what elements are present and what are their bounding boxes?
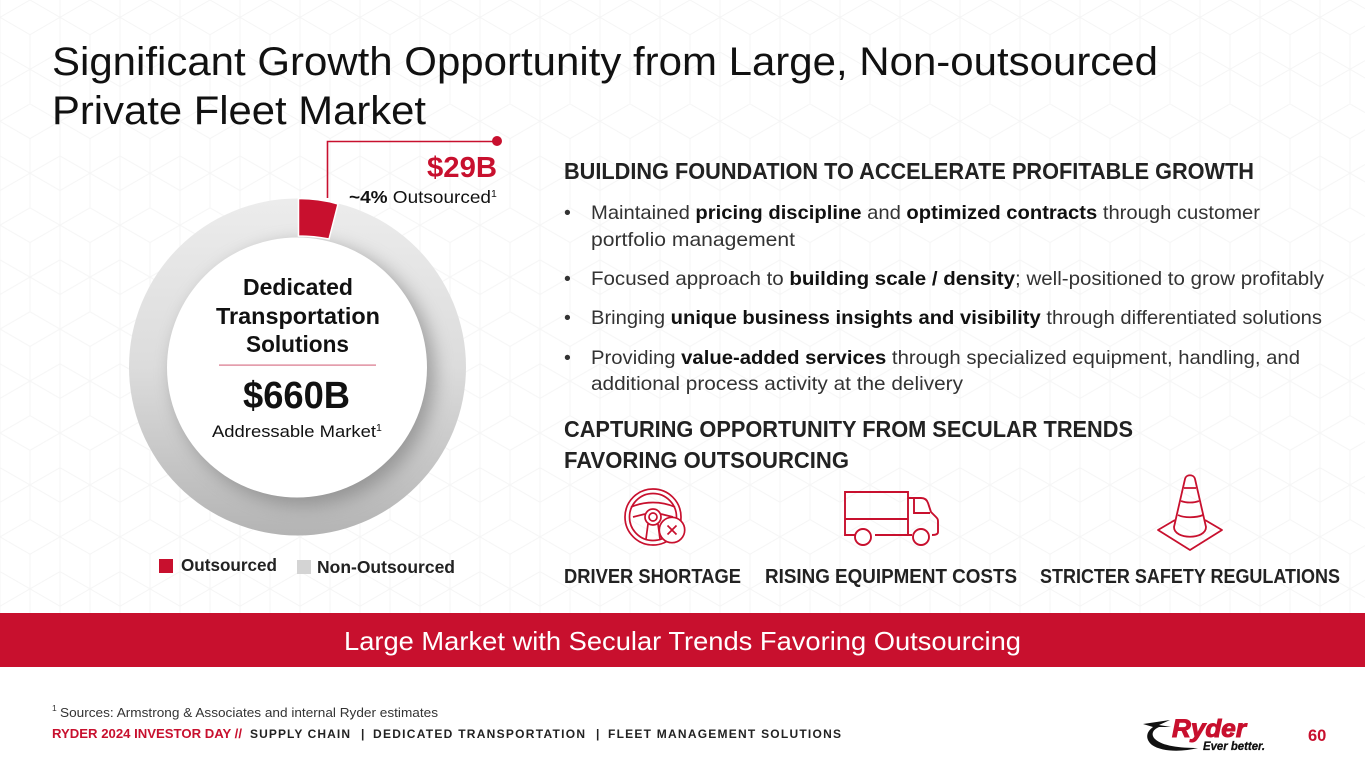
centre label: Dedicated [243, 274, 353, 300]
banner [0, 613, 1365, 667]
footer white band [0, 667, 1365, 768]
heading: capturing opportunity: CAPTURING OPPORTUNITY FROM SECULAR TRENDS [564, 416, 1133, 442]
footer line: | [361, 727, 364, 741]
bullet list: • [564, 347, 571, 369]
callout: outsourced value [328, 136, 502, 207]
footnote: 1 [52, 703, 57, 713]
ryder logo [1143, 715, 1265, 753]
trend labels: RISING EQUIPMENT COSTS [765, 566, 1017, 588]
bullet list: Bringing unique business insights and visibility through differentiated solutions [591, 307, 1322, 329]
donut chart: dedicated transportation market [129, 198, 466, 536]
inner circle [167, 238, 427, 498]
centre label: Solutions [246, 331, 349, 357]
banner: Large Market with Secular Trends Favoring Outsourcing [344, 626, 1021, 656]
footer line: FLEET MANAGEMENT SOLUTIONS [608, 727, 841, 741]
outsourced segment [298, 198, 338, 239]
heading: capturing opportunity [564, 416, 1133, 473]
footnote: Sources: Armstrong & Associates and internal Ryder estimates [60, 705, 439, 720]
inner circle shadow [173, 243, 435, 505]
callout: outsourced value: 1 [491, 188, 497, 200]
title: Significant Growth Opportunity from Large, Non-outsourced [52, 40, 1158, 84]
icon: traffic cone [1158, 475, 1222, 550]
footer line: RYDER 2024 INVESTOR DAY // [52, 726, 242, 741]
chart legend [159, 555, 455, 577]
trend labels: DRIVER SHORTAGE [564, 566, 741, 588]
bullet list: additional process activity at the delivery [591, 373, 963, 395]
title: Private Fleet Market [52, 89, 426, 133]
callout: outsourced value: $29B [427, 152, 497, 184]
bullet list: Providing value-added services through specialized equipment, handling, and [591, 347, 1300, 369]
page number: 60 [1308, 727, 1326, 745]
icon: truck [845, 492, 938, 545]
centre label: Transportation [216, 303, 380, 329]
non-outsourced ring [129, 198, 466, 536]
chart legend: Non-Outsourced [317, 557, 455, 577]
heading: capturing opportunity: FAVORING OUTSOURCING [564, 447, 849, 473]
centre label: Addressable Market [212, 422, 376, 441]
trend labels [564, 566, 1340, 588]
bullet list: • [564, 268, 571, 290]
centre label: 1 [376, 422, 382, 434]
ryder logo: Ryder [1172, 715, 1247, 743]
title [52, 40, 1158, 133]
footer line: DEDICATED TRANSPORTATION [373, 727, 585, 741]
heading: building foundation: BUILDING FOUNDATION TO ACCELERATE PROFITABLE GROWTH [564, 158, 1254, 184]
bullet list: Maintained pricing discipline and optimized contracts through customer [591, 202, 1261, 224]
centre label [212, 274, 382, 441]
bullet list [564, 202, 1324, 395]
centre label: $660B [243, 375, 350, 417]
bullet list: portfolio management [591, 229, 796, 251]
footer line: | [596, 727, 599, 741]
bullet list: • [564, 307, 571, 329]
bullet list: Focused approach to building scale / density ; well-positioned to grow profitably [591, 268, 1324, 290]
trend labels: STRICTER SAFETY REGULATIONS [1040, 566, 1340, 588]
bullet list: • [564, 202, 571, 224]
ryder logo: Ever better. [1203, 739, 1265, 753]
icon: steering wheel with x [625, 489, 685, 545]
footer line: SUPPLY CHAIN [250, 727, 350, 741]
chart legend: Outsourced [181, 555, 277, 575]
footer line [52, 726, 841, 741]
callout: outsourced value: ~4% Outsourced [349, 187, 491, 207]
